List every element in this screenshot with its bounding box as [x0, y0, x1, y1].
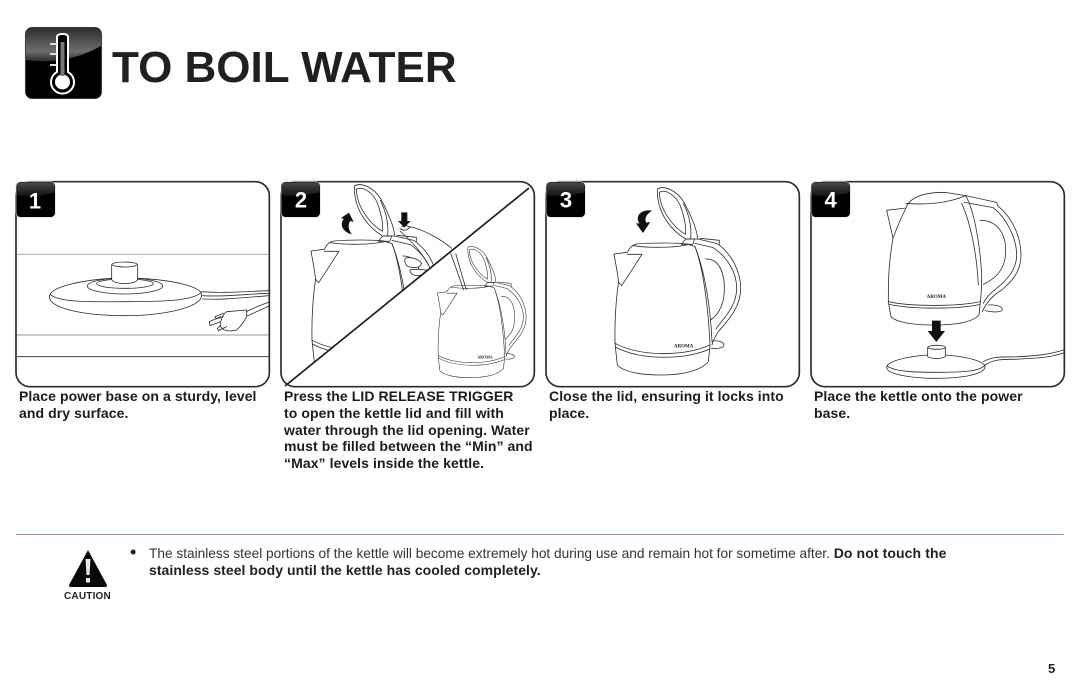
step number badge: 1 — [29, 188, 41, 213]
title: TO BOIL WATER — [112, 43, 457, 92]
caption: step 4: Place the kettle onto the power — [814, 388, 1023, 404]
panel: step 4 — [811, 182, 1064, 387]
step number badge: 2 — [295, 188, 307, 213]
power base illustration — [49, 262, 268, 331]
caption: step 2: to open the kettle lid and fill with — [284, 405, 504, 421]
panel: step 1 — [16, 182, 269, 387]
caption: step 1: Place power base on a sturdy, level — [19, 388, 257, 404]
caution text: The stainless steel portions of the kettle will become extremely hot during use and remain hot for sometime after. Do not touch the — [149, 545, 947, 561]
kettle with lid open — [614, 188, 741, 375]
small kettle being filled — [437, 247, 526, 378]
step number badge — [281, 182, 320, 217]
arrow: lid closing — [636, 210, 652, 233]
panel: step 2 — [281, 182, 534, 387]
hand pressing trigger — [400, 226, 452, 276]
caution text: stainless steel body until the kettle has cooled completely. — [149, 562, 541, 578]
caption: step 3: place. — [549, 405, 589, 421]
caption: step 4: base. — [814, 405, 850, 421]
panel: step 3 — [546, 182, 799, 387]
step number badge — [546, 182, 585, 217]
closed kettle — [887, 192, 1063, 378]
bullet marker: • — [130, 542, 136, 562]
step number badge — [16, 182, 55, 217]
small kettle being filled: AROMA — [477, 354, 493, 359]
caption: step 1: and dry surface. — [19, 405, 128, 421]
icon: caution triangle — [69, 550, 107, 587]
arrow: press down — [398, 212, 411, 228]
page number: 5 — [1048, 661, 1055, 676]
caption: step 2: water through the lid opening. Water — [284, 422, 530, 438]
step number badge — [811, 182, 850, 217]
caption: step 2: “Max” levels inside the kettle. — [284, 455, 484, 471]
arrow: place down — [928, 321, 945, 342]
caption: step 1 — [19, 388, 257, 421]
caption: step 2 — [284, 388, 533, 471]
caption: step 3: Close the lid, ensuring it locks into — [549, 388, 784, 404]
table surface lines — [17, 254, 269, 357]
icon: thermometer — [25, 27, 102, 99]
caption: step 3 — [549, 388, 784, 421]
caption: step 2: must be filled between the “Min” and — [284, 438, 533, 454]
arrow: lid up — [341, 213, 354, 234]
step number badge: 3 — [560, 188, 572, 213]
caution text — [149, 545, 947, 578]
kettle with lid open: AROMA — [674, 344, 694, 349]
caption: step 2: Press the LID RELEASE TRIGGER — [284, 388, 513, 404]
diagonal divider — [285, 188, 529, 386]
step number badge: 4 — [825, 188, 838, 213]
caption: step 4 — [814, 388, 1023, 421]
caution label: CAUTION — [64, 591, 111, 602]
brand label: AROMA — [927, 295, 946, 300]
kettle being opened — [311, 185, 438, 372]
